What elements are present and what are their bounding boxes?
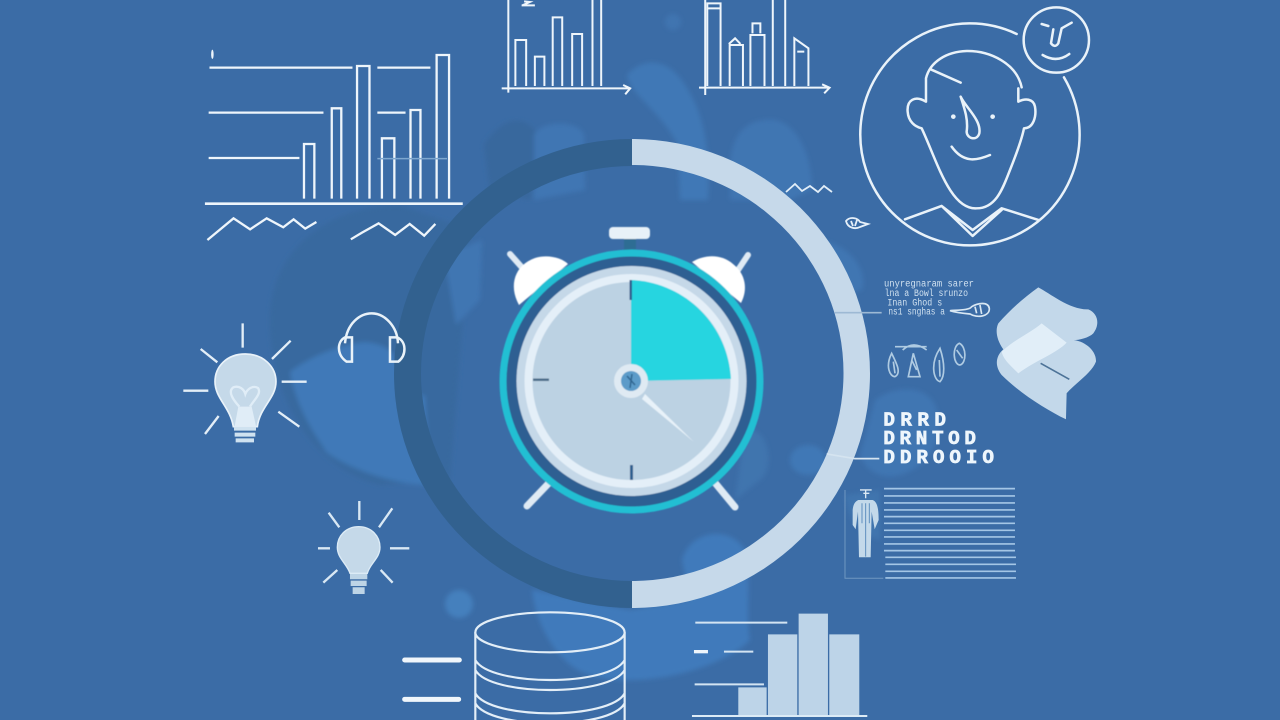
- clock: face: [532, 282, 730, 480]
- small bulb base: [350, 574, 367, 594]
- bulb filament: [231, 387, 259, 407]
- portrait: large circle: [860, 23, 1080, 245]
- caption line 3: Inan Ghod s: [887, 298, 942, 309]
- handwritten caption: unyregnaram sarer: [884, 279, 974, 290]
- bulb base: [234, 427, 256, 442]
- leader line upper: [835, 310, 882, 315]
- block row 3: DDROOIO: [883, 447, 994, 469]
- label mark: [522, 1, 535, 5]
- icon: large light bulb: [183, 323, 307, 442]
- ring: dark left half: [394, 139, 632, 608]
- portrait: head: [908, 51, 1035, 208]
- portrait: hair line: [931, 69, 961, 83]
- clock: left bell: [510, 254, 568, 305]
- database: body and rings: [475, 632, 625, 720]
- database: dash lines: [405, 660, 459, 699]
- clock: cyan rim: [503, 253, 760, 510]
- bulb rays: [183, 323, 307, 434]
- caption scribble: [950, 303, 989, 316]
- portrait: nose: [961, 97, 980, 138]
- clock: tick at 9: [533, 378, 549, 381]
- bulb glass: [215, 354, 276, 427]
- glyph icons: [888, 343, 965, 382]
- annotation: small scribble icon: [846, 218, 868, 228]
- chart: bars: [304, 55, 449, 199]
- bars: [515, 0, 601, 86]
- person info box: [845, 489, 1016, 578]
- chart: wave left: [207, 218, 316, 240]
- ribbon body: [997, 287, 1097, 419]
- portrait: smile: [952, 147, 990, 159]
- clock: white inner ring: [524, 274, 738, 488]
- chart: grid lines: [209, 68, 430, 158]
- annotation: upper wave: [786, 184, 832, 192]
- clock: top button: [609, 227, 650, 252]
- chart: marker: [211, 50, 214, 59]
- clock: pale outer rim: [516, 266, 746, 496]
- leader line lower: [827, 454, 879, 459]
- chart: wave right: [351, 223, 435, 239]
- bar chart: large top left: [205, 50, 463, 240]
- bulb lower glow: [235, 407, 256, 426]
- icon: small light bulb: [318, 501, 409, 594]
- clock: tick at 6: [630, 465, 633, 480]
- histogram lines: [695, 623, 787, 684]
- chart: faint line: [377, 158, 447, 160]
- right side annotations: [827, 279, 1016, 578]
- ribbon crease: [1041, 363, 1069, 379]
- short dash: [694, 647, 708, 657]
- box outline: [845, 490, 883, 578]
- block row 1: DRRD: [883, 409, 946, 431]
- small bulb glass: [337, 527, 380, 573]
- small bulb rays: [318, 501, 409, 583]
- portrait badge: [860, 7, 1089, 245]
- clock: center hub: [614, 364, 648, 398]
- ring: light right half: [632, 139, 870, 608]
- database: top disk: [475, 612, 625, 652]
- bars: [707, 0, 808, 86]
- clock: right bell: [692, 255, 748, 303]
- text lines: [884, 489, 1016, 578]
- clock: right foot: [716, 484, 735, 507]
- axes: [502, 0, 630, 94]
- chart: axis: [205, 202, 463, 205]
- axis: [692, 713, 867, 719]
- light ribbon icon: [997, 287, 1097, 419]
- database icon: [405, 612, 625, 720]
- background blobs: [270, 14, 939, 680]
- bar chart: bottom right: [692, 614, 867, 716]
- portrait: eyes: [951, 114, 995, 119]
- axes: [699, 0, 830, 95]
- clock: minute hand: [642, 394, 694, 442]
- alarm clock: [503, 227, 760, 510]
- bar chart: top right: [699, 0, 830, 95]
- caption line 2: lna a Bowl srunzo: [885, 288, 968, 299]
- clock: tick at 12: [630, 280, 632, 300]
- block text rows: [883, 409, 994, 469]
- caption line 4: ns1 snghas a: [888, 306, 945, 317]
- small face: circle: [1024, 7, 1089, 73]
- bar chart: top middle: [502, 0, 630, 94]
- histogram bars: [738, 614, 859, 715]
- person figure: [853, 490, 879, 557]
- block row 2: DRNTOD: [883, 428, 976, 450]
- clock: cyan quarter wedge: [631, 280, 731, 381]
- ribbon highlight: [1002, 323, 1067, 373]
- icon: headphones: [339, 313, 404, 362]
- portrait: collar: [905, 206, 1038, 236]
- small face: features: [1042, 23, 1072, 59]
- clock: left foot: [527, 484, 548, 506]
